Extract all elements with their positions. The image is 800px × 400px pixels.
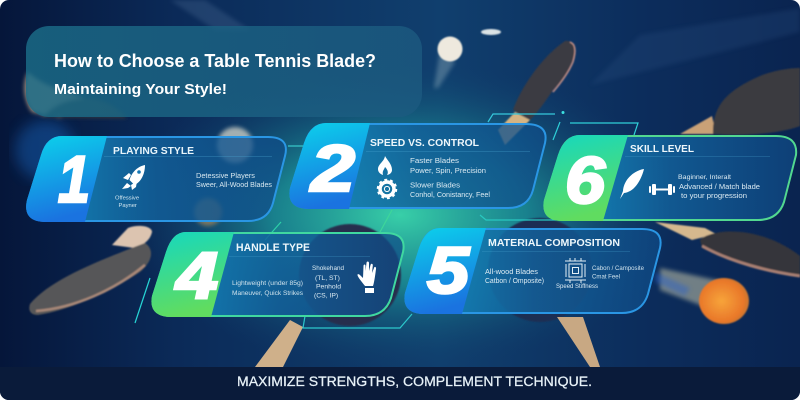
- icon: dumbbell: [649, 184, 675, 195]
- footer band: [0, 367, 800, 400]
- icon: rocket: [122, 165, 145, 190]
- panel: 2 speed vs control: [289, 123, 546, 209]
- text: skill progression: Advanced / Match blade: [679, 182, 760, 191]
- ball: behind card 1: [217, 127, 253, 163]
- label: offensive player: Payner: [118, 203, 137, 209]
- icon: hand: [357, 262, 376, 293]
- paddle: top centre: [498, 41, 575, 145]
- text: carbon composite: Cmat Feel: [592, 274, 620, 280]
- label: offensive player: Offessive: [115, 196, 139, 202]
- heading: PLAYING STYLE: [113, 145, 194, 157]
- icon: flame: [378, 156, 392, 175]
- ball: motion top: [434, 29, 501, 88]
- heading: SKILL LEVEL: [630, 144, 694, 155]
- number tile: [26, 136, 107, 222]
- text: defensive players: Detessive Players: [196, 173, 256, 180]
- paddle: bottom right: [488, 218, 600, 367]
- text: all-wood blades: All-wood Blades: [485, 269, 539, 276]
- number tile: [289, 123, 370, 209]
- panel: 4 handle type: [151, 232, 404, 317]
- text: all-wood blades: Catbon / Omposite): [485, 278, 544, 285]
- number: 1: [58, 142, 90, 216]
- text: grip types: (CS, IP): [314, 292, 338, 300]
- number: 5: [427, 233, 470, 307]
- ball: behind card 1 bottom: [194, 198, 222, 226]
- heading: SPEED VS. CONTROL: [370, 137, 480, 149]
- title panel: [26, 26, 422, 117]
- title: How to Choose a Table Tennis Blade?: [54, 51, 376, 71]
- text: faster blades: Power, Spin, Precision: [410, 166, 486, 175]
- number: 4: [174, 238, 218, 312]
- text: defensive players: Sweer, All-Wood Blades: [196, 182, 273, 189]
- heading: MATERIAL COMPOSITION: [488, 237, 620, 249]
- text: lightweight: Lightweight (under 85g): [232, 280, 303, 287]
- number: 2: [309, 131, 355, 205]
- number tile: [151, 232, 234, 317]
- text: lightweight: Maneuver, Quick Strikes: [232, 290, 304, 297]
- paddle: left behind title: [25, 72, 127, 118]
- footer text: MAXIMIZE STRENGTHS, COMPLEMENT TECHNIQUE.: [237, 374, 592, 389]
- panel: 1 playing style: [26, 136, 286, 222]
- icon: gear: [378, 180, 396, 198]
- text: slower blades: Conhol, Conistancy, Feel: [410, 190, 490, 199]
- number tile: [404, 228, 486, 314]
- text: slower blades: Slower Blades: [410, 180, 460, 190]
- text: grip types: Shokehand: [312, 265, 344, 272]
- icon: carbon weave: [565, 258, 586, 283]
- icon: feather: [620, 169, 644, 199]
- text: skill progression: to your progression: [681, 191, 747, 200]
- heading: HANDLE TYPE: [236, 242, 310, 254]
- text: carbon composite: Cabon / Camposite: [592, 265, 644, 272]
- text: grip types: (TL, ST): [315, 275, 340, 282]
- panel: 5 material composition: [404, 228, 661, 314]
- paddle: right middle: [655, 222, 800, 276]
- text: faster blades: Faster Blades: [410, 156, 459, 165]
- circuit accent lines: [135, 111, 638, 328]
- number tile: [543, 135, 628, 221]
- text: speed stiffness: Speed Stiffness: [556, 283, 599, 290]
- paddle: left middle: [29, 226, 152, 315]
- subtitle: Maintaining Your Style!: [54, 82, 227, 98]
- panel: 6 skill level: [543, 135, 796, 221]
- ball: orange: [655, 268, 749, 324]
- paddle: bottom left: [255, 224, 401, 367]
- text: skill progression: [678, 175, 760, 200]
- text: grip types: Penhold: [316, 284, 341, 290]
- number: 6: [565, 143, 606, 217]
- text: skill progression: Baginner, Interalt: [678, 175, 731, 181]
- paddle: top right: [680, 68, 800, 135]
